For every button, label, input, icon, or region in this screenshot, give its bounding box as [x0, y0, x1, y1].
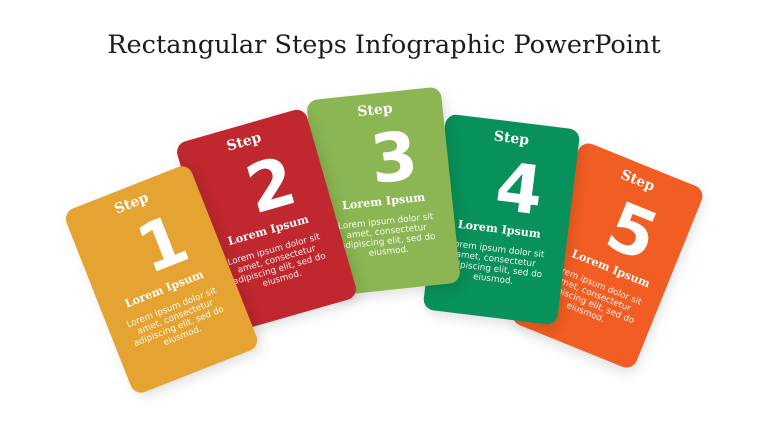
step 1 text: adipiscing elit, sed do	[133, 305, 226, 349]
panel: step 4 card	[422, 114, 581, 325]
step 4 label: Step	[493, 129, 530, 149]
step 1 text: amet, consectetur	[136, 298, 215, 337]
step 2 text: Lorem ipsum dolor sit	[227, 232, 321, 268]
step 3 text: amet, consectetur	[346, 223, 427, 241]
step 4 number: 4	[491, 147, 547, 230]
step 5 text: eiusmod.	[565, 301, 606, 325]
panel: step 1 card	[63, 163, 260, 396]
step 3 heading: Lorem Ipsum	[341, 190, 426, 212]
step 1 text: eiusmod.	[162, 324, 203, 348]
step 1 heading: Lorem Ipsum	[123, 267, 205, 311]
step 4 text: amet, consectetur	[455, 250, 536, 269]
step 3 number: 3	[367, 116, 421, 199]
step 5 heading: Lorem Ipsum	[570, 246, 652, 290]
step 3 text: eiusmod.	[368, 245, 409, 259]
step 2 label: Step	[225, 130, 263, 155]
step 2 text: amet, consectetur	[237, 244, 317, 276]
step 3 text	[338, 212, 436, 259]
step 5 number: 5	[596, 187, 669, 276]
step 1 number: 1	[127, 199, 199, 289]
step 5 label: Step	[618, 167, 657, 195]
step 3 text: Lorem ipsum dolor sit	[338, 212, 434, 232]
panel: step 3 card	[306, 86, 461, 297]
step 3 label: Step	[357, 101, 393, 120]
step 4 text: eiusmod.	[472, 272, 514, 287]
step 1 label: Step	[112, 190, 151, 218]
step 5 text: adipiscing elit, sed do	[543, 281, 635, 326]
step 5 text: Lorem ipsum dolor sit	[550, 263, 643, 308]
title: Rectangular Steps Infographic PowerPoint	[107, 30, 661, 60]
step 4 text	[446, 239, 545, 287]
panel: step 2 card	[174, 107, 359, 334]
step 3 text: adipiscing elit, sed do	[340, 232, 436, 252]
step 4 heading: Lorem Ipsum	[457, 217, 542, 241]
step 1 text: Lorem ipsum dolor sit	[125, 286, 218, 330]
step 1 text	[125, 286, 226, 349]
step 2 text: eiusmod.	[261, 269, 303, 289]
step 4 text: Lorem ipsum dolor sit	[449, 239, 545, 260]
step 2 number: 2	[238, 141, 304, 229]
step 4 text: adipiscing elit, sed do	[446, 259, 543, 280]
panel: step 5 card	[509, 140, 706, 371]
step 5 text	[543, 263, 643, 326]
step 2 text	[227, 232, 327, 289]
step 2 text: adipiscing elit, sed do	[232, 251, 327, 287]
step 2 heading: Lorem Ipsum	[226, 212, 310, 248]
step 5 text: amet, consectetur	[554, 275, 632, 314]
